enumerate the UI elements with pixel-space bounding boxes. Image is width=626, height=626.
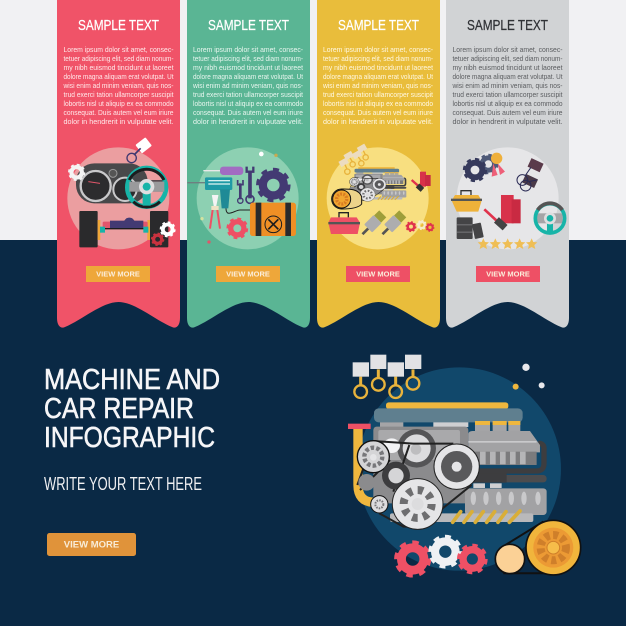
text block: gray card: dolor in hendrerit in vulputate velit. [452, 117, 562, 126]
text block: red card: dolor in hendrerit in vulputate velit. [64, 117, 174, 126]
navy background [0, 240, 626, 626]
button: yellow card [346, 266, 410, 282]
title: INFOGRAPHIC [44, 422, 215, 454]
engine block and pulleys [357, 402, 547, 529]
text block: green card: dolore magna aliquam erat volutpat. Ut [193, 72, 303, 81]
text block: yellow card: lobortis nisl ut aliquip ex ea commodo [323, 99, 433, 108]
text block: yellow card: Lorem ipsum dolor sit amet, consec- [323, 45, 434, 54]
icon: piston [127, 137, 152, 163]
text block: gray card [452, 45, 563, 126]
text block: red card: trud exerci tation ullamcorper suscipit [64, 90, 174, 99]
text block: gray card: trud exerci tation ullamcorper suscipit [452, 90, 562, 99]
text block: red card: consequat. Duis autem vel eum iriure [64, 108, 174, 117]
text block: green card: my nibh euismod tincidunt ut laoreet [193, 63, 303, 72]
heading: red card: SAMPLE TEXT [78, 17, 159, 34]
belt pulleys [495, 520, 581, 575]
button: red card: VIEW MORE [96, 270, 140, 278]
top background band [0, 0, 626, 240]
heading: gray card: SAMPLE TEXT [467, 17, 548, 34]
text block: yellow card: my nibh euismod tincidunt ut laoreet [323, 63, 433, 72]
text block: green card: Lorem ipsum dolor sit amet, consec- [193, 45, 304, 54]
text block: gray card: lobortis nisl ut aliquip ex ea commodo [452, 99, 562, 108]
panel: red sample card [57, 0, 180, 328]
title: CAR REPAIR [44, 393, 194, 425]
text block: green card: trud exerci tation ullamcorper suscipit [193, 90, 303, 99]
decorative dots [513, 364, 545, 390]
text block: green card: dolor in hendrerit in vulputate velit. [193, 117, 303, 126]
text block: yellow card: tetuer adipiscing elit, sed diam nonum- [323, 54, 434, 63]
text block: green card: tetuer adipiscing elit, sed diam nonum- [193, 54, 304, 63]
text block: yellow card: dolor in hendrerit in vulputate velit. [323, 117, 433, 126]
text block: red card: lobortis nisl ut aliquip ex ea commodo [64, 99, 174, 108]
icon: five stars [478, 238, 537, 249]
button: gray card: VIEW MORE [486, 270, 530, 278]
text block: green card: consequat. Duis autem vel eum iriure [193, 108, 303, 117]
text block: yellow card: dolore magna aliquam erat volutpat. Ut [323, 72, 433, 81]
coolant pipe [348, 424, 373, 502]
text block: gray card: tetuer adipiscing elit, sed diam nonum- [452, 54, 563, 63]
text block: gray card: Lorem ipsum dolor sit amet, consec- [452, 45, 563, 54]
text block: gray card: wisi enim ad minim veniam, quis nos- [452, 81, 563, 90]
text block: yellow card [322, 45, 434, 126]
button: main view more: VIEW MORE [64, 540, 119, 550]
text block: green card [192, 45, 304, 126]
backdrop circle [358, 367, 561, 571]
text block: gray card: consequat. Duis autem vel eum iriure [452, 108, 562, 117]
button: green card: VIEW MORE [226, 270, 270, 278]
illustration: dashboard and axle [67, 137, 174, 249]
illustration: repair tools [187, 147, 299, 249]
button: main view more [47, 533, 136, 556]
panel: gray sample card [446, 0, 569, 328]
text block: yellow card: trud exerci tation ullamcorper suscipit [323, 90, 433, 99]
text block: green card: wisi enim ad minim veniam, quis nos- [192, 81, 304, 90]
illustration: large engine [348, 355, 581, 575]
heading: yellow card: SAMPLE TEXT [338, 17, 419, 34]
subtitle: WRITE YOUR TEXT HERE [44, 474, 202, 494]
button: gray card [476, 266, 540, 282]
text block: red card: dolore magna aliquam erat volutpat. Ut [64, 72, 174, 81]
button: red card [86, 266, 150, 282]
icon: four pistons [353, 355, 421, 398]
text block: green card: lobortis nisl ut aliquip ex ea commodo [193, 99, 303, 108]
text block: red card [63, 45, 174, 126]
heading: green card: SAMPLE TEXT [208, 17, 289, 34]
text block: yellow card: consequat. Duis autem vel eum iriure [323, 108, 433, 117]
illustration: engine parts [327, 144, 434, 249]
text block: yellow card: wisi enim ad minim veniam, quis nos- [322, 81, 434, 90]
icon: white gear [69, 165, 84, 180]
text block: red card: my nibh euismod tincidunt ut laoreet [64, 63, 174, 72]
title [44, 364, 220, 454]
button: yellow card: VIEW MORE [356, 270, 400, 278]
text block: red card: Lorem ipsum dolor sit amet, consec- [64, 45, 174, 54]
button: green card [216, 266, 280, 282]
panel: green sample card [187, 0, 310, 328]
text block: red card: tetuer adipiscing elit, sed diam nonum- [64, 54, 174, 63]
illustration: parts and five stars [451, 147, 565, 249]
text block: gray card: my nibh euismod tincidunt ut laoreet [452, 63, 562, 72]
gears [397, 537, 485, 575]
title: MACHINE AND [44, 364, 220, 396]
text block: red card: wisi enim ad minim veniam, quis nos- [63, 81, 174, 90]
panel: yellow sample card [317, 0, 440, 328]
text block: gray card: dolore magna aliquam erat volutpat. Ut [452, 72, 562, 81]
